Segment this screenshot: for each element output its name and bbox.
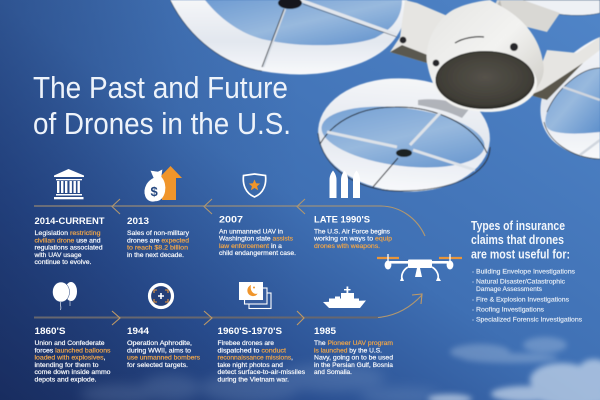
event: 1860's: Union and Confederate bbox=[34, 340, 105, 347]
icon: money bag with rising arrow: $ bbox=[150, 184, 158, 199]
icon: government building bbox=[54, 169, 84, 199]
icon: reconnaissance photos bbox=[239, 282, 271, 308]
event: 2007: child endangerment case. bbox=[219, 250, 296, 257]
rotor: bottom left bbox=[314, 73, 494, 197]
event: 2014-current: 2014-CURRENT bbox=[34, 215, 105, 226]
panel: insurance claims bbox=[471, 218, 583, 324]
event: 1985: The Pioneer UAV program bbox=[314, 340, 393, 347]
event: 2014-current: with UAV usage bbox=[33, 252, 82, 259]
event: 1960's-1970's: Firebee drones are bbox=[218, 340, 274, 347]
event: 1944 bbox=[127, 325, 201, 369]
event: 2013: 2013 bbox=[127, 215, 149, 226]
event: 2014-current: Legislation restricting bbox=[34, 230, 101, 237]
icon: drone bbox=[377, 254, 462, 281]
heading: insurance claims: Types of insurance bbox=[471, 218, 565, 233]
event: 1860's: loaded with explosives , bbox=[34, 355, 106, 362]
clouds bbox=[80, 337, 600, 400]
event: 1960's-1970's bbox=[218, 325, 306, 384]
list: claim types: Damage Assessments bbox=[476, 286, 543, 293]
event: 1960's-1970's: 1960'S-1970'S bbox=[218, 325, 282, 336]
event: 2007: 2007 bbox=[219, 214, 243, 224]
icon: bullets bbox=[330, 170, 360, 198]
list: claim types: Natural Disaster/Catastrophic bbox=[476, 278, 566, 286]
event: late 1990's: The U.S. Air Force begins bbox=[314, 228, 391, 235]
event: late 1990's bbox=[313, 214, 392, 250]
event: 1985 bbox=[314, 325, 393, 376]
icon: navy ship bbox=[323, 286, 366, 308]
event: 2013: drones are expected bbox=[127, 237, 189, 244]
event: 1944: during WWII, aims to bbox=[127, 347, 191, 354]
event: 2013: to reach $8.2 billion bbox=[127, 244, 188, 252]
title: The Past and Future bbox=[33, 70, 288, 105]
timeline: lower line with arrowheads bbox=[34, 294, 422, 325]
event: 1944: Operation Aphrodite, bbox=[127, 340, 192, 347]
event: 1960's-1970's: reconnaissance missions, bbox=[218, 355, 293, 362]
event: 1944: 1944 bbox=[127, 325, 150, 336]
event: 1960's-1970's: take night photos and bbox=[218, 362, 283, 369]
event: 1860's bbox=[34, 325, 111, 384]
timeline: upper line with arrowheads bbox=[34, 199, 425, 236]
event: 2007: Washington state assists bbox=[219, 236, 294, 243]
event: 1985: Navy, going on to be used bbox=[314, 355, 393, 362]
event: 1985: 1985 bbox=[314, 325, 336, 336]
drone body and arms bbox=[390, 0, 600, 111]
event: 1860's: 1860'S bbox=[34, 325, 66, 336]
icon: money bag with rising arrow bbox=[145, 166, 182, 201]
icon: police shield bbox=[243, 174, 266, 197]
event: 2007 bbox=[219, 214, 296, 257]
rotor: right bbox=[540, 37, 600, 159]
event: 1960's-1970's: dispatched to conduct bbox=[218, 347, 286, 354]
event: late 1990's: LATE 1990'S bbox=[314, 214, 370, 224]
rotor: top left bbox=[170, 0, 407, 74]
event: 2014-current: civilian drone use and bbox=[34, 237, 101, 244]
event: 2014-current: regulations associated bbox=[34, 244, 103, 252]
event: 2014-current: continue to evolve. bbox=[34, 259, 92, 266]
heading: insurance claims: claims that drones bbox=[471, 232, 564, 247]
event: 2007: law enforcement in a bbox=[219, 243, 282, 250]
event: 1944: use unmanned bombers bbox=[127, 355, 201, 362]
event: late 1990's: working on ways to equip bbox=[313, 236, 392, 243]
heading: insurance claims bbox=[471, 218, 570, 262]
list: claim types: Building Envelope Investigations bbox=[476, 268, 576, 276]
heading: insurance claims: are most useful for: bbox=[471, 246, 570, 262]
event: 2007: An unmanned UAV in bbox=[219, 228, 283, 235]
event: 2014-current bbox=[33, 215, 105, 266]
event: 1860's: forces launched balloons bbox=[34, 347, 111, 354]
title bbox=[33, 70, 291, 141]
event: late 1990's: drones with weapons. bbox=[314, 243, 380, 250]
event: 1860's: come down inside ammo bbox=[34, 369, 111, 376]
rotor: top right bbox=[523, 0, 600, 15]
event: 1960's-1970's: during the Vietnam war. bbox=[218, 376, 289, 384]
event: 1985: and Somalia. bbox=[314, 369, 352, 376]
camera dome bbox=[400, 37, 538, 114]
event: 1944: for selected targets. bbox=[127, 362, 188, 369]
icon: target reticle bbox=[150, 284, 172, 308]
title: of Drones in the U.S. bbox=[33, 106, 291, 141]
list: claim types bbox=[472, 268, 583, 324]
event: 1985: in the Persian Gulf, Bosnia bbox=[314, 362, 393, 369]
list: claim types: Specialized Forensic Investigations bbox=[476, 316, 583, 324]
drone photograph bbox=[170, 0, 600, 197]
event: 1860's: intending for them to bbox=[34, 362, 99, 369]
event: 2013: Sales of non-military bbox=[127, 230, 190, 237]
event: 2013 bbox=[127, 215, 190, 259]
event: 1860's: depots and explode. bbox=[34, 376, 97, 384]
event: 1985: is launched by the U.S. bbox=[314, 347, 382, 354]
icon: balloons bbox=[52, 282, 77, 310]
event: 1960's-1970's: detect surface-to-air-missiles bbox=[218, 369, 306, 376]
list: claim types: Fire & Explosion Investigations bbox=[476, 296, 570, 304]
event: 2013: in the next decade. bbox=[127, 252, 184, 259]
list: claim types: Roofing Investigations bbox=[476, 306, 545, 314]
